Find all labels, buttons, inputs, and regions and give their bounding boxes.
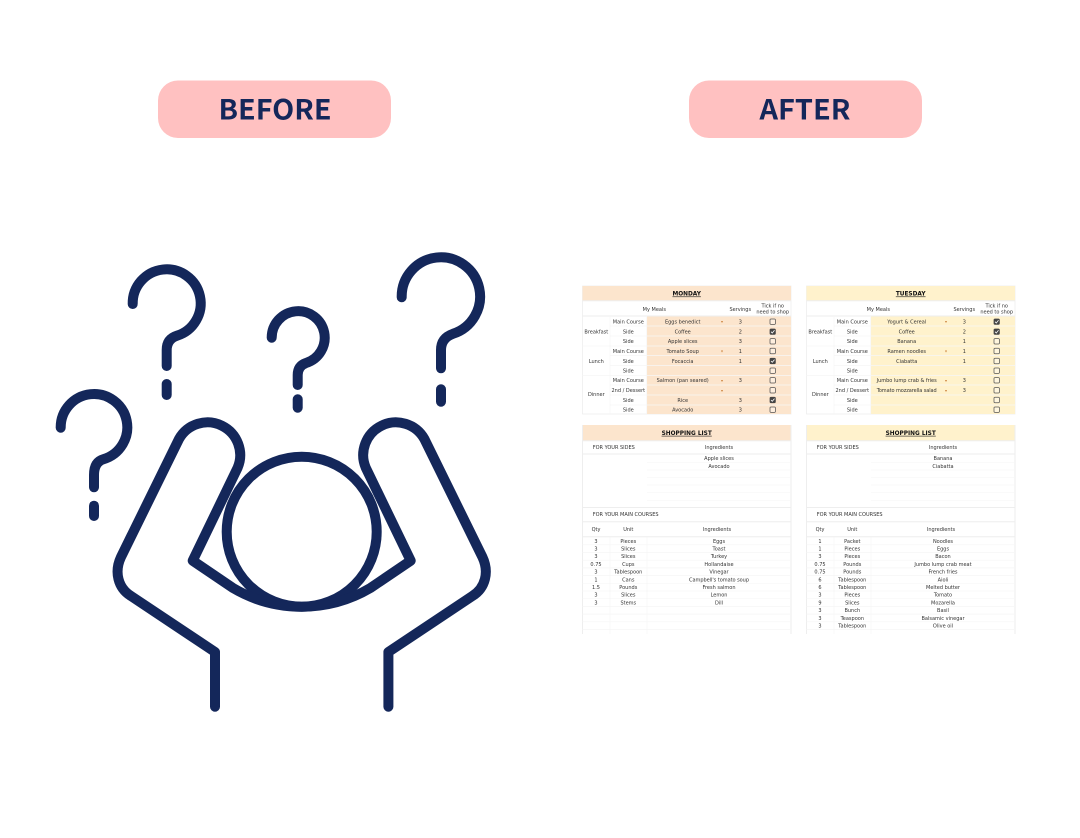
panel: Monday meal plan: 1 (739, 359, 742, 365)
panel: Monday shopping list: Cans (622, 577, 635, 583)
badge: after: AFTER (758, 88, 850, 128)
icon: question mark upper right (402, 257, 480, 402)
heading: shopping list: SHOPPING LIST (886, 431, 936, 437)
panel: Monday meal plan: Main Course (613, 320, 644, 326)
badge: before (158, 80, 391, 138)
panel: Monday shopping list: Apple slices (704, 456, 734, 462)
panel: Tuesday shopping list: 0.75 (814, 570, 826, 576)
panel: Tuesday shopping list: Eggs (937, 546, 949, 552)
panel: Tuesday shopping list: 6 (818, 585, 822, 591)
panel: Monday meal plan: 2 (739, 330, 742, 336)
panel: Monday shopping list: Vinegar (709, 570, 730, 576)
panel: Tuesday meal plan: Tick if no (984, 304, 1008, 310)
badge: after (689, 80, 922, 138)
panel: Tuesday meal plan (806, 286, 1015, 414)
panel: Monday shopping list: FOR YOUR MAIN COURSES (593, 512, 659, 518)
panel: Tuesday meal plan: Lunch (813, 359, 828, 365)
panel: Tuesday meal plan: Tomato mozzarella salad (876, 388, 937, 394)
panel: Tuesday shopping list: 6 (818, 577, 822, 583)
panel: Tuesday shopping list: Ingredients (929, 445, 957, 451)
panel: Tuesday meal plan: Ciabatta (896, 359, 917, 365)
panel: Tuesday shopping list: FOR YOUR MAIN COURSES (817, 512, 883, 518)
panel: Tuesday shopping list: FOR YOUR SIDES (817, 445, 859, 451)
panel: Monday meal plan: 2nd / Dessert (611, 388, 645, 394)
panel: Monday shopping list: Slices (621, 593, 636, 599)
panel: Tuesday meal plan: 2nd / Dessert (835, 388, 869, 394)
panel: Tuesday shopping list: French fries (928, 570, 958, 576)
panel: Tuesday meal plan: ▾ (945, 388, 947, 393)
panel: Tuesday meal plan: Main Course (837, 378, 868, 384)
panel: Monday shopping list: Eggs (713, 539, 725, 545)
panel: Tuesday meal plan: Ramen noodles (887, 349, 926, 355)
panel: Tuesday shopping list (806, 425, 1015, 634)
panel: Monday meal plan: 3 (739, 378, 742, 384)
panel: Tuesday meal plan: Coffee (899, 330, 915, 336)
panel: Tuesday meal plan: 2 (963, 330, 966, 336)
panel: Monday shopping list: Slices (621, 546, 636, 552)
panel: Monday shopping list: Hollandaise (704, 562, 734, 568)
panel: Tuesday meal plan: Side (847, 339, 858, 345)
panel: Monday shopping list: 1.5 (592, 585, 600, 591)
icon: confused person holding head (118, 422, 486, 707)
panel: Monday meal plan: 3 (739, 339, 742, 345)
heading: Monday: MONDAY (672, 292, 702, 298)
panel: Tuesday shopping list: 3 (818, 608, 822, 614)
panel: Monday meal plan: Avocado (672, 408, 693, 414)
panel: Monday meal plan: Side (623, 398, 634, 404)
panel: Monday meal plan: 3 (739, 398, 742, 404)
panel: Monday meal plan: ▾ (721, 378, 723, 383)
panel: Monday shopping list: Avocado (708, 464, 730, 470)
panel: Monday meal plan: Tick if no (760, 304, 784, 310)
panel: Tuesday shopping list: Balsamic vinegar (921, 616, 965, 622)
panel: Tuesday shopping list: Aioli (938, 577, 948, 583)
panel: Tuesday shopping list: Packet (844, 539, 861, 545)
panel: Monday shopping list: 3 (594, 554, 598, 560)
panel: Tuesday shopping list: 1 (818, 546, 822, 552)
panel: Tuesday shopping list: Unit (847, 527, 857, 533)
panel: Tuesday shopping list: 3 (818, 624, 822, 630)
panel: Tuesday shopping list: 9 (818, 600, 822, 606)
panel: Monday meal plan: Apple slices (668, 339, 698, 345)
panel: Tuesday shopping list: Bunch (844, 608, 860, 614)
panel: Monday shopping list: Ingredients (705, 445, 733, 451)
panel: Tuesday meal plan: Side (847, 359, 858, 365)
panel: Tuesday shopping list: Basil (937, 608, 949, 614)
heading: shopping list: SHOPPING LIST (662, 431, 712, 437)
panel: Monday meal plan: Side (623, 408, 634, 414)
panel: Tuesday meal plan: Side (847, 398, 858, 404)
panel: Tuesday shopping list: Pieces (844, 593, 861, 599)
panel: Tuesday meal plan: 3 (963, 378, 966, 384)
panel: Tuesday shopping list: Noodles (933, 539, 953, 545)
panel: Tuesday meal plan: Side (847, 330, 858, 336)
panel: Monday shopping list: Toast (712, 546, 725, 552)
panel: Monday meal plan: Eggs benedict (665, 320, 700, 326)
panel: Monday shopping list: Stems (620, 600, 637, 606)
panel: Monday meal plan: Tomato Soup (666, 349, 699, 355)
panel: Tuesday shopping list: Tablespoon (837, 585, 866, 591)
panel: Tuesday shopping list: Tablespoon (837, 577, 866, 583)
panel: Tuesday shopping list: Pounds (843, 562, 862, 568)
panel: Monday shopping list: Dill (715, 600, 723, 606)
panel: Tuesday meal plan: 1 (963, 339, 966, 345)
panel: Monday meal plan: Side (623, 368, 634, 374)
panel: Tuesday shopping list: Slices (845, 600, 860, 606)
panel: Tuesday shopping list: Melted butter (926, 585, 961, 591)
panel: Monday meal plan: Side (623, 339, 634, 345)
panel: Monday meal plan: Servings (729, 307, 751, 313)
panel: Monday shopping list: FOR YOUR SIDES (593, 445, 635, 451)
panel: Tuesday meal plan: ▾ (945, 378, 947, 383)
panel: Monday shopping list: Lemon (711, 593, 727, 599)
panel: Tuesday meal plan: Yogurt & Cereal (886, 320, 926, 326)
panel: Tuesday meal plan: 3 (963, 388, 966, 394)
panel: Monday shopping list: 3 (594, 570, 598, 576)
panel: Monday shopping list: Unit (623, 527, 633, 533)
panel: Monday meal plan: Main Course (613, 349, 644, 355)
panel: Monday shopping list: Qty (592, 527, 600, 533)
panel: Monday shopping list: Pieces (620, 539, 637, 545)
panel: Tuesday shopping list: Bacon (935, 554, 951, 560)
panel: Tuesday shopping list: Pounds (843, 570, 862, 576)
panel: Tuesday meal plan: Main Course (837, 320, 868, 326)
icon: question mark middle (272, 311, 325, 408)
panel: Tuesday shopping list: Tablespoon (837, 624, 866, 630)
panel: Monday meal plan: Breakfast (584, 330, 608, 336)
panel: Tuesday shopping list: Mozarella (931, 600, 955, 606)
panel: Tuesday meal plan: 1 (963, 359, 966, 365)
panel: Monday shopping list: Turkey (710, 554, 727, 560)
panel: Monday meal plan: need to shop (756, 310, 789, 316)
panel: Monday meal plan: 3 (739, 408, 742, 414)
panel: Tuesday shopping list: Banana (934, 456, 952, 462)
panel: Tuesday meal plan: ▾ (945, 348, 947, 354)
panel: Monday meal plan: Focaccia (672, 359, 693, 365)
panel: Tuesday shopping list: Olive oil (933, 624, 953, 630)
panel: Monday shopping list: Ingredients (703, 527, 731, 533)
panel: Tuesday shopping list: Pieces (844, 554, 861, 560)
panel: Tuesday meal plan: Servings (953, 307, 975, 313)
panel: Tuesday shopping list: 3 (818, 554, 822, 560)
panel: Monday shopping list (582, 425, 791, 634)
heading: Tuesday: TUESDAY (896, 292, 926, 298)
panel: Tuesday meal plan: Banana (897, 339, 916, 345)
panel: Monday meal plan: Rice (677, 398, 688, 404)
panel: Monday shopping list: 0.75 (590, 562, 602, 568)
panel: Tuesday meal plan: ▾ (945, 319, 947, 324)
panel: Monday meal plan: Salmon (pan seared) (657, 378, 709, 384)
panel: Monday shopping list: 3 (594, 600, 598, 606)
icon: question mark upper left (133, 269, 201, 395)
badge: before: BEFORE (218, 88, 332, 128)
panel: Monday meal plan: Lunch (589, 359, 604, 365)
panel: Tuesday meal plan: Dinner (812, 392, 830, 398)
panel: Tuesday shopping list: 3 (818, 616, 822, 622)
panel: Tuesday meal plan: need to shop (980, 310, 1013, 316)
panel: Monday meal plan: Side (623, 330, 634, 336)
panel: Tuesday shopping list: 1 (818, 539, 822, 545)
panel: Monday shopping list: Fresh salmon (702, 585, 736, 591)
panel: Tuesday shopping list: Pieces (844, 546, 861, 552)
panel: Monday meal plan: Coffee (675, 330, 691, 336)
panel: Monday meal plan: ▾ (721, 319, 723, 324)
panel: Monday shopping list: Slices (621, 554, 636, 560)
panel: Tuesday shopping list: Jumbo lump crab meat (913, 562, 972, 568)
panel: Monday shopping list: 3 (594, 546, 598, 552)
panel: Tuesday meal plan: 3 (963, 320, 966, 326)
panel: Monday meal plan: ▾ (721, 348, 723, 354)
panel: Monday shopping list: 3 (594, 593, 598, 599)
panel: Tuesday shopping list: Ciabatta (932, 464, 954, 470)
panel: Tuesday meal plan: 1 (963, 349, 966, 355)
panel: Tuesday meal plan: Breakfast (808, 330, 832, 336)
panel: Monday shopping list: Campbell's tomato soup (689, 577, 749, 583)
panel: Monday shopping list: Tablespoon (613, 570, 642, 576)
panel: Tuesday meal plan: My Meals (867, 307, 890, 313)
panel: Monday meal plan: 3 (739, 320, 742, 326)
panel: Monday shopping list: Pounds (619, 585, 638, 591)
icon: question mark far left (61, 394, 127, 516)
panel: Tuesday shopping list: Teaspoon (840, 616, 864, 622)
panel: Tuesday meal plan: Jumbo lump crab & fries (876, 378, 937, 384)
panel: Tuesday shopping list: Ingredients (927, 527, 955, 533)
panel: Monday meal plan: My Meals (643, 307, 666, 313)
panel: Tuesday shopping list: Qty (816, 527, 824, 533)
panel: Monday shopping list: 1 (594, 577, 598, 583)
panel: Tuesday shopping list: Tomato (933, 593, 952, 599)
panel: Monday meal plan: Dinner (588, 392, 606, 398)
panel: Tuesday meal plan: Side (847, 368, 858, 374)
panel: Monday shopping list: Cups (622, 562, 635, 568)
panel: Monday shopping list: 3 (594, 539, 598, 545)
panel: Monday meal plan: ▾ (721, 388, 723, 393)
panel: Monday meal plan (582, 286, 791, 414)
panel: Monday meal plan: 1 (739, 349, 742, 355)
panel: Tuesday shopping list: 0.75 (814, 562, 826, 568)
panel: Monday meal plan: Side (623, 359, 634, 365)
panel: Tuesday meal plan: Main Course (837, 349, 868, 355)
panel: Tuesday shopping list: 3 (818, 593, 822, 599)
panel: Monday meal plan: Main Course (613, 378, 644, 384)
panel: Tuesday meal plan: Side (847, 408, 858, 414)
